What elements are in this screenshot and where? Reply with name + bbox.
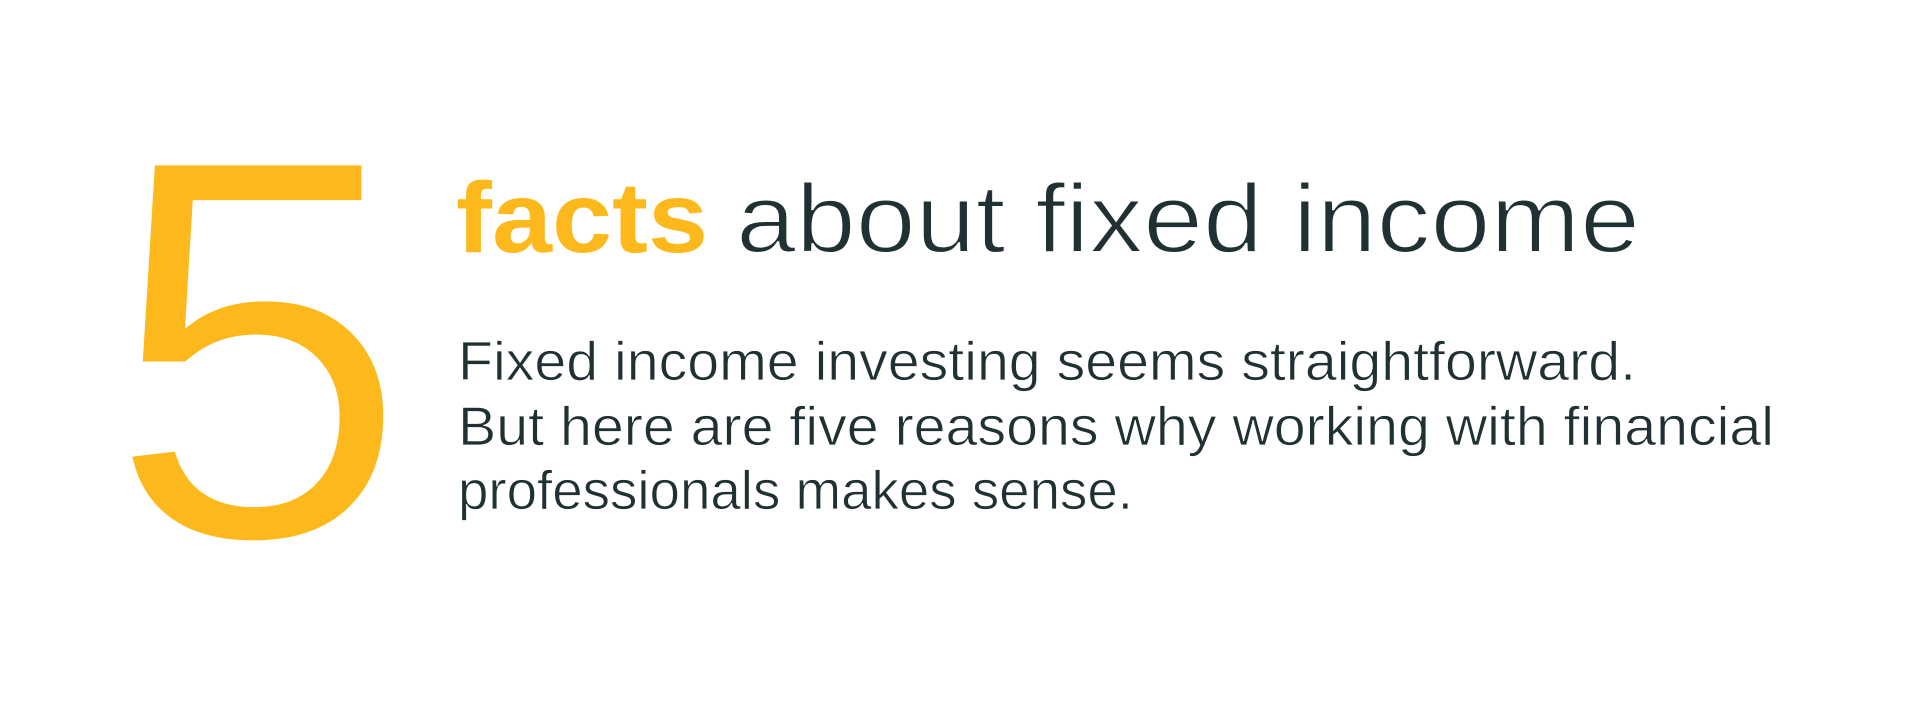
intro paragraph: Fixed income investing seems straightforward. — [458, 330, 1636, 392]
intro paragraph: professionals makes sense. — [458, 459, 1133, 521]
title — [456, 162, 1640, 274]
intro paragraph — [458, 330, 1774, 521]
title remainder: about fixed income — [736, 164, 1640, 273]
large numeral 5: 5 — [107, 44, 409, 654]
title highlight: facts: facts — [456, 162, 708, 274]
intro paragraph: But here are five reasons why working with financial — [458, 395, 1774, 457]
